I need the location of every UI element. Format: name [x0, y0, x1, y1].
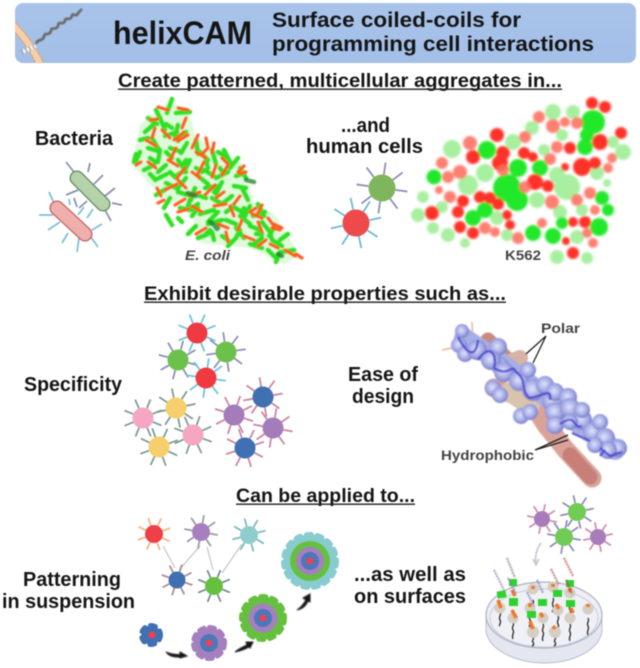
label: human cells: human cells	[306, 136, 423, 158]
heading: desirable properties: Exhibit desirable properties such as...	[144, 284, 506, 305]
icon: two human cells	[326, 159, 411, 253]
red and green cluster	[154, 307, 249, 401]
label: human cells	[306, 115, 423, 158]
purple and blue cluster	[209, 374, 296, 473]
caption: E. coli: E. coli	[185, 247, 231, 263]
orange linkers	[498, 584, 588, 629]
title: helixCAM	[113, 15, 252, 51]
diagram: coiled-coil protein structure	[442, 322, 627, 478]
dish	[486, 582, 602, 663]
label: human cells: ...and	[341, 115, 390, 137]
aggregate stage 3	[242, 596, 284, 640]
surface tethers	[499, 598, 589, 646]
diagram: specific cell clusters	[117, 307, 296, 473]
diagram: interaction network of cells	[132, 512, 270, 608]
icon: cell membrane with coiled-coil	[12, 9, 82, 66]
arrow: stage 3 to 4	[297, 594, 310, 610]
aggregate stage 1	[142, 626, 160, 644]
label: as well as on surfaces	[354, 564, 466, 608]
icon: two bacteria	[39, 162, 122, 252]
aggregate stage 2	[194, 628, 224, 658]
diagram: cells added to surface	[524, 492, 616, 565]
heading: create aggregates: Create patterned, multicellular aggregates in...	[118, 71, 562, 92]
surface anchors	[494, 582, 594, 638]
label: hydrophobic: Hydrophobic	[441, 447, 534, 463]
arrow: stage 1 to 2	[166, 652, 187, 658]
label: polar: Polar	[541, 320, 581, 336]
label: as well as on surfaces: ...as well as	[354, 564, 466, 586]
label: patterning in suspension: in suspension	[2, 591, 135, 613]
helical linkers	[494, 558, 573, 606]
label: patterning in suspension: Patterning	[23, 569, 121, 591]
aggregate stage 4	[284, 534, 336, 588]
label: specificity: Specificity	[24, 374, 123, 396]
header banner	[12, 3, 636, 66]
subtitle: Surface coiled-coils for	[272, 9, 521, 32]
arrow: cells down to dish	[533, 543, 541, 565]
label: hydrophobic	[441, 435, 568, 463]
diagram: petri dish with surface proteins	[486, 558, 602, 663]
label: patterning in suspension	[2, 569, 135, 613]
label: polar	[526, 320, 581, 363]
subtitle: programming cell interactions	[272, 33, 594, 56]
label: ease of design: Ease of	[348, 364, 418, 386]
label: ease of design: design	[352, 386, 414, 408]
heading: applications: Can be applied to...	[236, 486, 415, 507]
chart: E. coli aggregate micrograph	[132, 99, 302, 264]
chart: K562 aggregate micrograph	[411, 97, 631, 264]
diagram: growing layered aggregates	[142, 534, 336, 658]
arrow: stage 2 to 3	[235, 642, 253, 652]
label: as well as on surfaces: on surfaces	[354, 586, 466, 608]
label: ease of design	[348, 364, 418, 408]
caption: K562: K562	[505, 247, 541, 263]
green receptors	[497, 579, 575, 618]
subtitle	[272, 9, 594, 56]
yellow and pink cluster	[117, 384, 219, 473]
label: bacteria: Bacteria	[35, 128, 114, 150]
